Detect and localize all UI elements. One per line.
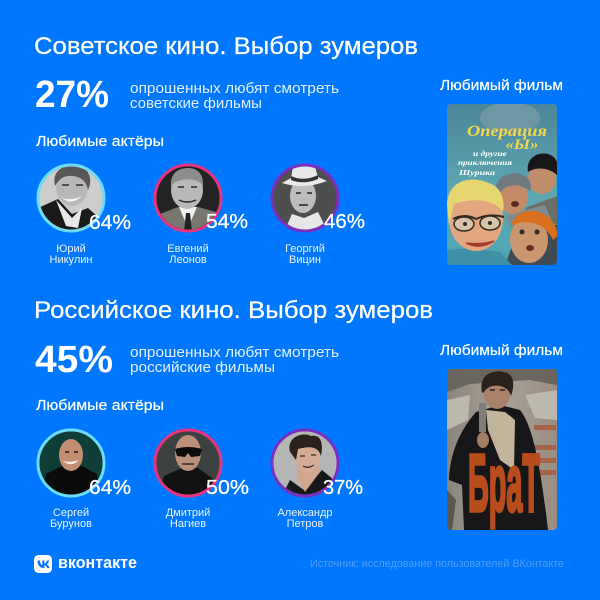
value: 50%: [206, 476, 249, 499]
heading: favourite actors: Любимые актёры: [36, 134, 164, 150]
value: 37%: [323, 476, 363, 499]
actor: Georgy Vitsin: [272, 164, 365, 266]
name: Юрий: [56, 243, 86, 255]
logo wordmark: вконтакте: [58, 553, 137, 572]
value: 64%: [89, 211, 131, 234]
name: Бурунов: [50, 518, 92, 530]
actor: Sergey Burunov: [38, 430, 131, 530]
actor: Evgeny Leonov: [155, 165, 248, 266]
poster title: [458, 123, 547, 177]
actor: Alexander Petrov: [272, 430, 363, 530]
name: Дмитрий: [166, 507, 210, 519]
name: Александр: [277, 507, 333, 519]
name: Сергей: [53, 507, 89, 519]
name: Петров: [287, 518, 324, 530]
poster title: приключения: [458, 158, 512, 167]
character: black hat: [525, 153, 560, 225]
actor: Dmitry Nagiev: [155, 430, 249, 530]
stat: 45%: 45%: [35, 339, 113, 381]
heading: Russian cinema: Российское кино. Выбор зумеров: [34, 297, 433, 324]
poster title: Операция: [467, 123, 547, 140]
stat description: опрошенных любят смотреть: [130, 80, 339, 97]
value: 46%: [324, 210, 365, 233]
logo: VK: [34, 555, 52, 573]
name: Леонов: [169, 254, 207, 266]
source note: Источник: исследование пользователей ВКонтакте: [310, 558, 564, 570]
section: Soviet cinema: [34, 33, 563, 266]
value: 64%: [89, 476, 131, 499]
stat description: советские фильмы: [130, 95, 262, 112]
name: Евгений: [167, 243, 209, 255]
character: fur hat: [496, 173, 552, 230]
heading: favourite film: Любимый фильм: [440, 78, 563, 94]
name: Нагиев: [170, 518, 206, 530]
name: Вицин: [289, 254, 321, 266]
value: 54%: [206, 210, 248, 233]
actor: Yuri Nikulin: [38, 165, 131, 266]
stat description: [130, 344, 339, 376]
poster title: Шурика: [458, 168, 495, 177]
character: Shurik: [447, 180, 512, 265]
heading: Soviet cinema: Советское кино. Выбор зумеров: [34, 33, 418, 60]
section: Russian cinema: [34, 297, 563, 530]
stat description: российские фильмы: [130, 359, 275, 376]
stat description: опрошенных любят смотреть: [130, 344, 339, 361]
poster title: «Ы»: [506, 137, 538, 153]
heading: favourite film: Любимый фильм: [440, 343, 563, 359]
poster: Brother: [447, 369, 557, 530]
stat: 27%: 27%: [35, 74, 109, 116]
name: Никулин: [50, 254, 92, 266]
name: Георгий: [285, 243, 325, 255]
poster title: и другие: [473, 149, 508, 158]
heading: favourite actors: Любимые актёры: [36, 398, 164, 414]
character: orange hat: [505, 211, 558, 265]
footer: [34, 553, 564, 573]
figure in coat: [449, 371, 548, 530]
poster: Operation Y: [447, 102, 560, 265]
stat description: [130, 80, 339, 112]
